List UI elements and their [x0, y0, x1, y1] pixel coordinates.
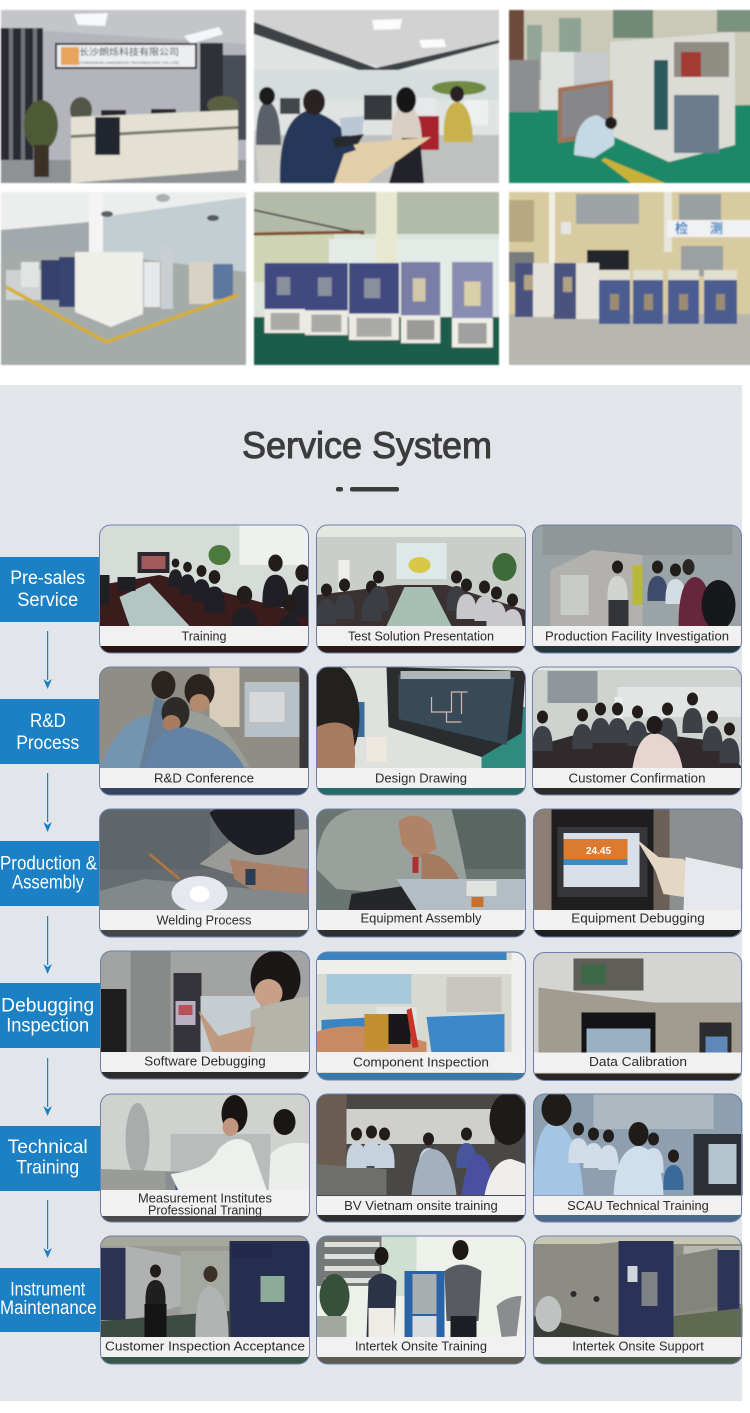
card: Welding Process: Welding Process: [156, 914, 252, 928]
card: Measurement Institutes Professional Training: Professional Traning: [148, 1204, 262, 1218]
process step labels: [0, 557, 101, 1332]
arrow 4: [43, 1058, 52, 1116]
step: Pre-sales Service: Pre-sales: [10, 568, 85, 589]
step: Technical Training: Training: [16, 1158, 79, 1178]
card: Component Inspection: Component Inspection: [353, 1056, 489, 1070]
card: Equipment Debugging: [534, 809, 742, 937]
process arrows: [43, 631, 52, 1258]
card: Intertek Onsite Support: Intertek Onsite Support: [572, 1340, 704, 1354]
step: Instrument Maintenance: Maintenance: [0, 1298, 97, 1319]
card: Customer Confirmation: [532, 667, 742, 795]
card: Test Solution Presentation: Test Solution Presentation: [348, 630, 494, 644]
card: Software Debugging: [100, 951, 310, 1079]
step: Debugging Inspection: Inspection: [6, 1016, 89, 1036]
card: R&D Conference: [100, 667, 308, 795]
card: Data Calibration: Data Calibration: [589, 1055, 687, 1069]
photo: factory aisle with chambers: [1, 192, 246, 365]
photo: five climate chambers: [254, 192, 499, 365]
step: Technical Training: [0, 1126, 101, 1191]
card: Equipment Assembly: Equipment Assembly: [360, 912, 482, 926]
step: Pre-sales Service: [0, 557, 100, 622]
card: Production Facility Investigation: Production Facility Investigation: [545, 630, 729, 644]
card: BV Vietnam onsite training: [316, 1093, 528, 1222]
card: Customer Confirmation: Customer Confirmation: [568, 772, 706, 786]
card: Intertek Onsite Training: Intertek Onsite Training: [355, 1340, 487, 1354]
panel: service system: [0, 385, 742, 1401]
step: Production & Assembly: Assembly: [12, 872, 84, 894]
photo: reception desk: 长沙朗烁科技有限公司: [79, 46, 179, 57]
card: SCAU Technical Training: [534, 1092, 742, 1222]
step: Instrument Maintenance: [0, 1268, 101, 1332]
card: Test Solution Presentation: [316, 525, 526, 653]
step: Debugging Inspection: [0, 983, 101, 1048]
arrow 3: [43, 916, 52, 974]
step: R&D Process: Process: [16, 733, 79, 754]
card: Training: Training: [182, 630, 227, 644]
card: Equipment Assembly: [316, 809, 526, 937]
card: R&D Conference: R&D Conference: [154, 772, 254, 786]
card: Production Facility Investigation: [532, 525, 742, 653]
step: Technical Training: Technical: [8, 1137, 88, 1158]
card: Intertek Onsite Support: [534, 1236, 742, 1364]
step: Production & Assembly: Production &: [0, 854, 97, 874]
card: Customer Inspection Acceptance: [100, 1236, 310, 1364]
card: BV Vietnam onsite training: BV Vietnam onsite training: [344, 1199, 498, 1213]
card: Equipment Debugging: Equipment Debugging: [571, 912, 705, 926]
card: Design Drawing: [306, 665, 526, 795]
photo: chambers outside building: [509, 192, 750, 365]
card: Component Inspection: [316, 952, 526, 1080]
photo: reception desk: CHANGSHA LANGSHUO TECHNOLOGY CO.,LTD: [79, 60, 179, 65]
step: R&D Process: [0, 699, 100, 764]
title divider: [336, 487, 399, 492]
step: Instrument Maintenance: Instrument: [10, 1280, 86, 1300]
title: Service System: [242, 425, 492, 466]
arrow 2: [43, 773, 52, 832]
card: Data Calibration: [534, 952, 742, 1080]
card: Intertek Onsite Training: [316, 1236, 526, 1364]
photo: office workers: [254, 10, 499, 183]
card: Design Drawing: Design Drawing: [375, 772, 467, 786]
card: Equipment Debugging: 24.45: [586, 846, 611, 857]
photo: chambers outside building: 检 测: [675, 221, 723, 236]
step: Production & Assembly: [0, 841, 100, 906]
card: Customer Inspection Acceptance: Customer Inspection Acceptance: [105, 1340, 305, 1354]
arrow 5: [43, 1200, 52, 1258]
card: SCAU Technical Training: SCAU Technical Training: [567, 1199, 709, 1213]
step: Pre-sales Service: Service: [17, 590, 78, 611]
card: Measurement Institutes Professional Training: [100, 1094, 310, 1222]
card: Software Debugging: Software Debugging: [144, 1054, 266, 1068]
photo grid: company and factory: [1, 10, 750, 365]
photo: reception desk: [1, 10, 246, 183]
card: Measurement Institutes Professional Training: Measurement Institutes: [138, 1192, 272, 1206]
step: Debugging Inspection: Debugging: [1, 996, 94, 1016]
card: Welding Process: [100, 805, 308, 937]
photo: technician at test chamber: [509, 10, 750, 183]
step: R&D Process: R&D: [30, 711, 66, 732]
card: Training: [100, 525, 316, 653]
arrow 1: [43, 631, 52, 689]
